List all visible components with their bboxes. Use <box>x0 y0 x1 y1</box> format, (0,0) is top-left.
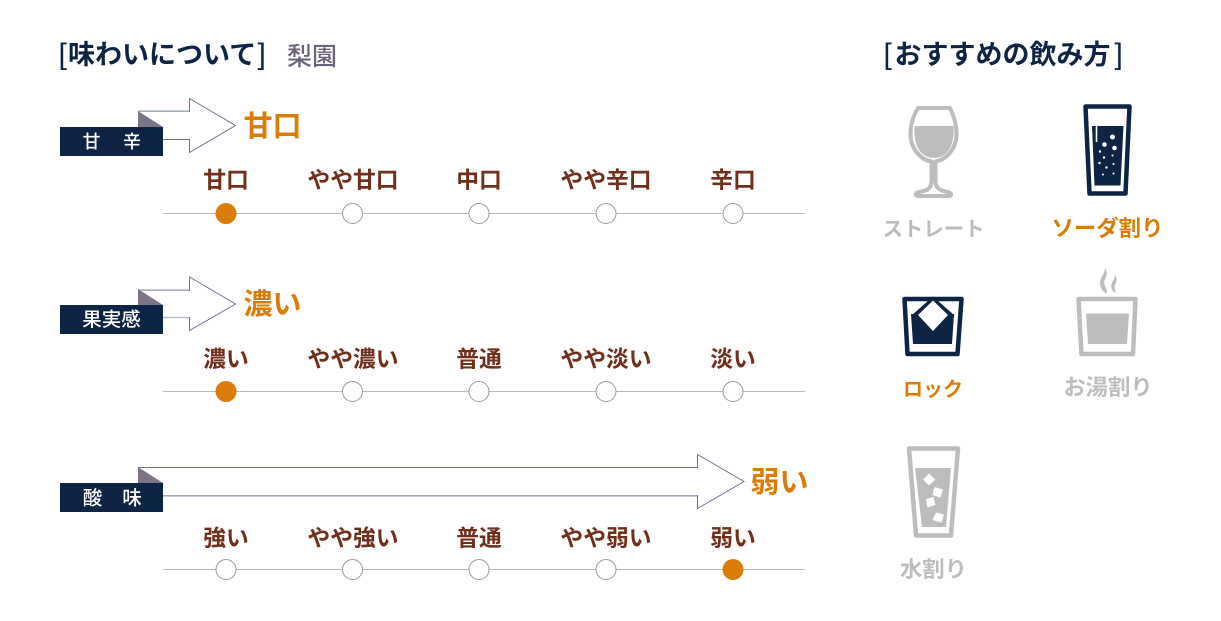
label: straight: ストレート <box>882 218 984 241</box>
scale track <box>163 381 805 402</box>
label: on the rocks: ロック <box>903 378 963 401</box>
scale labels: 普通 <box>456 346 502 372</box>
label: with water: 水割り <box>900 557 967 582</box>
scale labels: やや強い <box>307 525 399 551</box>
scale labels: 強い <box>203 525 249 551</box>
arrow: acidity <box>138 454 744 508</box>
scale labels: 弱い <box>710 525 756 551</box>
scale labels <box>203 346 756 372</box>
heading: taste: 味わいについて <box>68 40 256 70</box>
arrow: sweetness <box>138 98 236 152</box>
scale track <box>163 203 805 224</box>
label: soda: ソーダ割り <box>1052 215 1163 241</box>
scale labels: やや濃い <box>307 346 399 372</box>
label: fruitiness: 果実感 <box>82 308 141 331</box>
label: sweet/dry: 辛 <box>123 132 141 152</box>
scale labels: やや淡い <box>560 346 652 372</box>
scale labels: 淡い <box>710 346 756 372</box>
result: yowai: 弱い <box>750 467 809 499</box>
heading: taste: ] <box>258 38 266 71</box>
heading: recommended ways to drink: ] <box>1114 38 1123 71</box>
arrow: fruitiness <box>138 277 236 330</box>
panel: sweetness scale <box>60 98 805 224</box>
label: sweet/dry: 甘 <box>82 132 100 152</box>
heading: product name: 梨園 <box>287 43 337 71</box>
label: sweet/dry <box>60 111 163 156</box>
scale labels: やや甘口 <box>307 167 399 193</box>
panel: acidity scale <box>60 454 809 580</box>
heading: recommended ways to drink: おすすめの飲み方 <box>894 40 1110 70</box>
scale labels: やや弱い <box>560 525 652 551</box>
icon: hot water glass <box>1078 268 1136 354</box>
icon: soda glass <box>1086 106 1130 194</box>
label: acidity <box>60 467 163 512</box>
scale track <box>163 559 805 580</box>
result: amakuchi: 甘口 <box>244 110 302 143</box>
icon: rock glass <box>904 296 962 354</box>
scale labels: 甘口 <box>203 167 249 193</box>
scale labels: 濃い <box>203 346 249 372</box>
label: with hot water: お湯割り <box>1063 375 1153 400</box>
scale labels <box>203 525 756 551</box>
icon: wine glass <box>910 108 956 196</box>
icon: water glass <box>909 448 958 536</box>
scale labels: 辛口 <box>710 167 756 193</box>
scale labels <box>203 167 756 193</box>
heading: recommended ways to drink: [ <box>884 38 892 71</box>
scale labels: やや辛口 <box>560 167 652 193</box>
scale labels: 普通 <box>456 525 502 551</box>
panel: fruitiness scale <box>60 277 805 402</box>
scale labels: 中口 <box>456 167 502 193</box>
result: koi: 濃い <box>244 288 302 321</box>
label: fruitiness <box>60 289 163 334</box>
heading: taste: [ <box>58 38 68 71</box>
label: acidity: 味 <box>122 488 142 510</box>
label: acidity: 酸 <box>83 488 103 510</box>
